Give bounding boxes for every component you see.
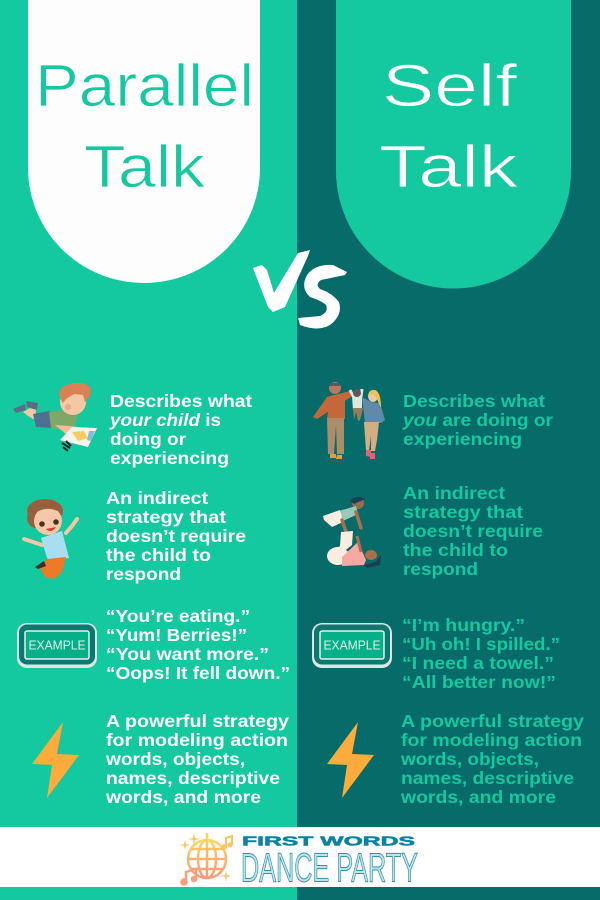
- text: self row 4: names, descriptive: [401, 768, 574, 788]
- text: parallel row 3: “Oops! It fell down.”: [106, 663, 290, 683]
- text: self row 4: A powerful strategy: [401, 711, 584, 731]
- text: self row 2: strategy that: [403, 502, 523, 522]
- VS brush lettering: [253, 250, 347, 328]
- logo icon: sparkles and notes: [180, 833, 232, 886]
- logo icon: disco ball: [188, 833, 226, 878]
- icon: boy lying down drawing: [13, 383, 97, 451]
- logo: First Words Dance Party: [180, 833, 418, 890]
- header shape: self talk: [336, 0, 571, 288]
- text: self row 2: [403, 483, 543, 579]
- text: parallel row 4: [105, 711, 289, 807]
- text: self row 2: doesn’t require: [403, 521, 543, 541]
- text: parallel row 2: An indirect: [106, 488, 208, 508]
- panel: self talk background: [297, 0, 600, 900]
- text: self row 3: “I’m hungry.”: [402, 615, 525, 635]
- text: self row 3: [402, 615, 560, 692]
- icon: lightning bolt: [327, 722, 374, 798]
- text: parallel row 3: [106, 606, 290, 683]
- text: parallel row 2: doesn’t require: [106, 526, 246, 546]
- title: Self Talk: Self: [382, 53, 518, 119]
- text: self row 3: “All better now!”: [402, 672, 556, 692]
- text: parallel row 2: respond: [106, 564, 181, 584]
- text: self row 2: An indirect: [403, 483, 505, 503]
- text: self row 1: experiencing: [403, 429, 522, 449]
- text: parallel row 1: doing or: [110, 429, 186, 449]
- text: parallel row 3: “You’re eating.”: [106, 606, 250, 626]
- title: Parallel Talk: [35, 53, 254, 200]
- text: parallel row 4: for modeling action: [106, 730, 288, 750]
- text: parallel row 4: words, objects,: [105, 749, 245, 769]
- text: self row 3: “I need a towel.”: [402, 653, 554, 673]
- panel: parallel talk background: [0, 0, 297, 900]
- title: Self Talk: [379, 53, 519, 200]
- text: parallel row 3: “Yum! Berries!”: [106, 625, 247, 645]
- text: parallel row 2: strategy that: [106, 507, 226, 527]
- title: Parallel Talk: Talk: [84, 134, 206, 200]
- logo text: Dance Party: DANCE PARTY: [241, 844, 418, 890]
- text: self row 4: words, objects,: [400, 749, 539, 769]
- title: Parallel Talk: Parallel: [35, 53, 254, 119]
- icon: lightning bolt: [32, 722, 79, 798]
- text: self row 1: Describes what: [403, 391, 545, 411]
- text: parallel row 1: [109, 391, 252, 468]
- icon: example sign: EXAMPLE: [28, 638, 86, 652]
- icon: example sign: [17, 623, 97, 668]
- text: parallel row 2: the child to: [106, 545, 211, 565]
- icon: parent lifting child: [323, 497, 381, 568]
- text: parallel row 4: A powerful strategy: [106, 711, 289, 731]
- icon: example sign: [312, 623, 392, 668]
- text: self row 3: “Uh oh! I spilled.”: [402, 634, 560, 654]
- text: self row 2: the child to: [403, 540, 508, 560]
- text: self row 1: [402, 391, 553, 449]
- text: self row 1: you are doing or: [402, 410, 553, 430]
- header shape: parallel talk: [28, 0, 260, 283]
- icon: example sign: EXAMPLE: [324, 638, 380, 652]
- text: self row 4: words, and more: [400, 787, 556, 807]
- text: parallel row 4: names, descriptive: [106, 768, 280, 788]
- footer band: [0, 827, 600, 887]
- text: self row 4: [400, 711, 584, 807]
- title: Self Talk: Talk: [379, 134, 519, 200]
- logo text: First Words: FIRST WORDS: [242, 834, 415, 848]
- text: parallel row 1: Describes what: [110, 391, 252, 411]
- text: parallel row 1: experiencing: [110, 448, 229, 468]
- text: parallel row 4: words, and more: [105, 787, 261, 807]
- text: self row 2: respond: [403, 559, 478, 579]
- icon: family holding child: [313, 382, 385, 459]
- text: parallel row 1: your child is: [109, 410, 221, 430]
- text: parallel row 2: [106, 488, 246, 584]
- icon: jumping boy: [24, 499, 77, 579]
- text: self row 4: for modeling action: [401, 730, 582, 750]
- text: parallel row 3: “You want more.”: [106, 644, 269, 664]
